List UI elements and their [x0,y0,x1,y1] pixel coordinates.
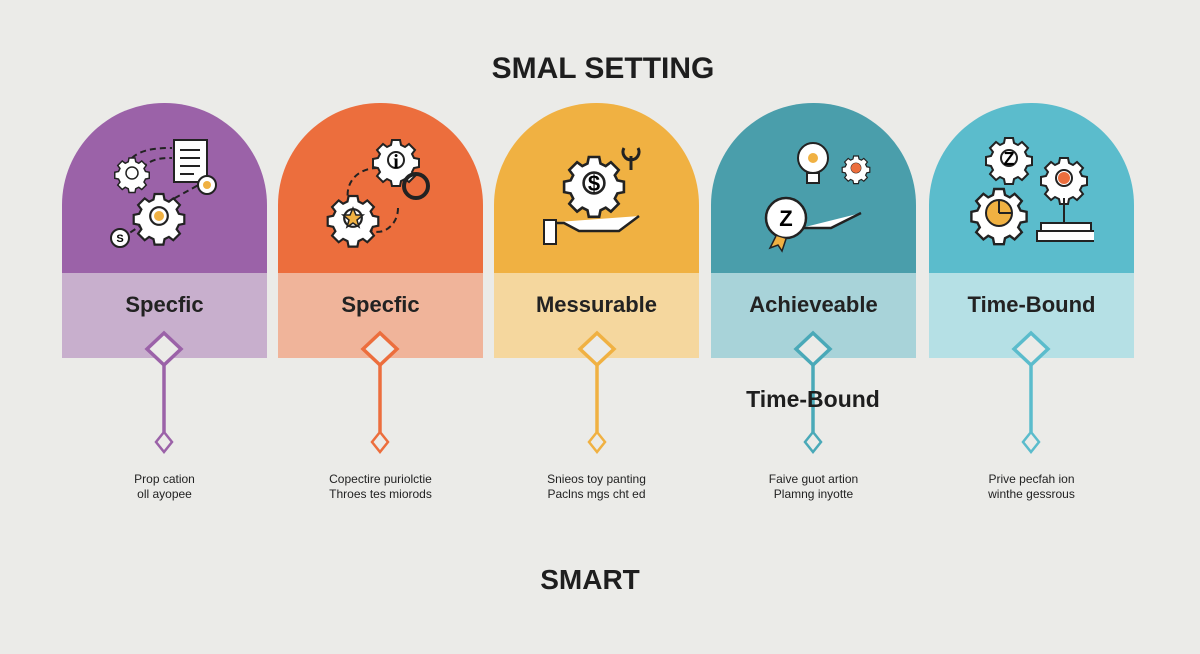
panel: achieveable [711,103,916,358]
label [494,273,699,358]
label [711,273,916,358]
icon: bulb, badge, hand [764,142,870,253]
label: Achieveable [749,292,878,317]
title: SMAL SETTING [492,52,714,85]
connector teal [796,333,830,452]
icon: star gear: i [393,151,399,173]
text: winthe gessrous [988,487,1075,501]
icon: gears and clock: Z [1004,149,1014,169]
label: Specfic [125,292,204,317]
icon: dollar gear with hand: $ [588,171,600,196]
icon: gears and document: S [116,233,124,245]
panel: measurable [494,103,699,358]
connector light blue [1014,333,1048,452]
icon: gears and clock [970,137,1094,246]
icon: bulb, badge, hand: Z [779,206,793,231]
connector purple [147,333,181,452]
text: Plamng inyotte [774,487,853,501]
text: Copectire puriolctie [329,472,432,486]
text: Prive pecfah ion [988,472,1075,486]
floating label: Time-Bound [746,386,880,412]
connector yellow [580,333,614,452]
text: Snieos toy panting [547,472,646,486]
captions: Prop cation [134,472,195,486]
label [62,273,267,358]
icon: gears and document [110,139,217,248]
captions: oll ayopee [137,487,192,501]
text: Throes tes miorods [329,487,432,501]
panel: specific 1 [62,103,267,358]
connector orange [363,333,397,452]
icon: dollar gear with hand [543,147,641,245]
icon: star gear [326,139,430,248]
panel: specific 2 [278,103,483,358]
text: Faive guot artion [769,472,858,486]
captions [134,472,195,501]
label: Time-Bound [968,292,1095,317]
panel: time-bound [929,103,1134,358]
label: Specfic [341,292,420,317]
label [929,273,1134,358]
footer: SMART [540,564,640,595]
text: Paclns mgs cht ed [547,487,646,501]
label [278,273,483,358]
label: Messurable [536,292,657,317]
